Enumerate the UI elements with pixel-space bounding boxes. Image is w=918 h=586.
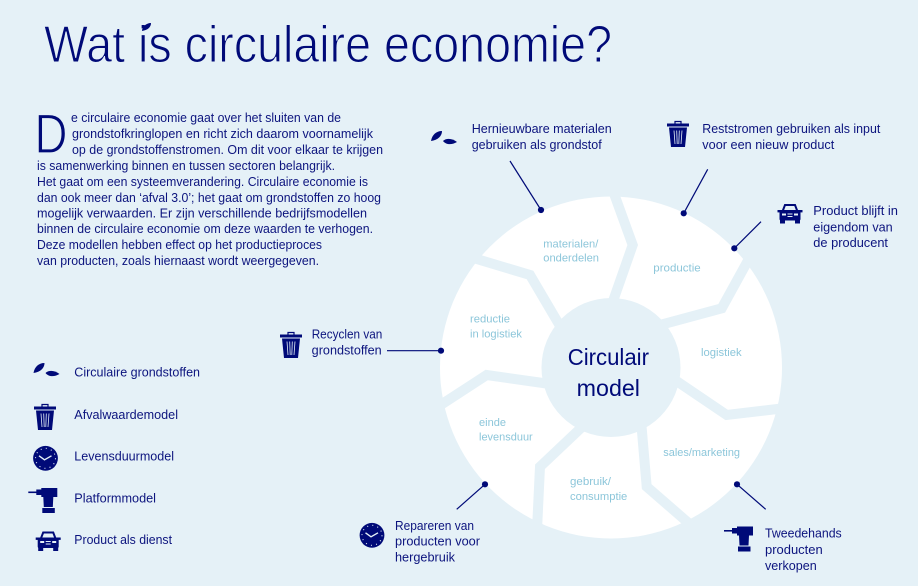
intro text block: grondstofkringlopen en richt zich daarom voornamelijk: [72, 127, 374, 141]
intro text block: [34, 102, 383, 268]
intro text block: mogelijk verwaarden. Er zijn verschillende bedrijfsmodellen: [37, 206, 367, 220]
icon: leaves: [431, 131, 457, 144]
callout text: verkopen: [765, 559, 817, 573]
title: Wat is circulaire economie?: [44, 16, 612, 74]
intro text block: op de grondstoffenstromen. Om dit voor elkaar te krijgen: [72, 143, 383, 157]
segment: gebruik/consumptie: consumptie: [570, 491, 627, 503]
icon: bin: [667, 122, 689, 147]
legend item: afvalwaardemodel: Afvalwaardemodel: [74, 408, 178, 422]
callout text: [472, 122, 612, 152]
callout: hernieuwbare materialen: [431, 122, 612, 213]
icon: bin: [280, 332, 302, 358]
icon: drill: [724, 526, 753, 552]
callout text: [395, 519, 480, 565]
segment separators: [436, 188, 790, 530]
centre circle: [542, 298, 680, 437]
intro text block: Deze modellen hebben effect op het productieproces: [37, 238, 322, 252]
callout: repareren: [360, 481, 488, 565]
segment: einde levensduur: levensduur: [479, 432, 533, 444]
callout text: Repareren van: [395, 519, 474, 533]
callout text: eigendom van: [813, 220, 893, 234]
segment: sales/marketing: sales/marketing: [663, 447, 740, 459]
callout text: hergebruik: [395, 551, 456, 565]
segment: materialen/onderdelen: materialen/: [543, 238, 598, 250]
white outer disc: [440, 196, 782, 538]
connector: [457, 481, 488, 509]
callout: recyclen: [280, 328, 444, 358]
callout text: Tweedehands: [765, 527, 842, 541]
segment: reductie in logistiek: [470, 314, 523, 341]
callout text: gebruiken als grondstof: [472, 138, 602, 152]
callout text: [702, 122, 881, 152]
callout: tweedehands: [724, 481, 842, 573]
intro text block: binnen de circulaire economie om deze waarden te verhogen.: [37, 222, 373, 236]
segment: gebruik/consumptie: gebruik/: [570, 476, 611, 488]
segment: einde levensduur: einde: [479, 417, 506, 429]
callout text: Recyclen van: [312, 328, 382, 342]
legend item: platformmodel: [28, 488, 156, 513]
segment: logistiek: logistiek: [701, 347, 742, 359]
segment: reductie in logistiek: reductie: [470, 314, 510, 326]
segment: gebruik/consumptie: [570, 476, 627, 503]
segment: einde levensduur: [479, 417, 533, 444]
segment: reductie in logistiek: in logistiek: [470, 329, 523, 341]
segment: productie: productie: [653, 263, 701, 275]
icon: car: [778, 205, 802, 224]
intro text block: van producten, zoals hiernaast wordt weergegeven.: [37, 254, 319, 268]
callout text: voor een nieuw product: [702, 138, 835, 152]
legend item: circulaire grondstoffen: [34, 363, 200, 380]
callout text: Reststromen gebruiken als input: [702, 122, 881, 136]
callout text: [813, 204, 898, 250]
centre label: Circulair: [568, 344, 649, 370]
connector: [387, 348, 444, 354]
legend item: platformmodel: Platformmodel: [74, 492, 156, 506]
callout text: de producent: [813, 236, 888, 250]
intro text block: dan ook meer dan ‘afval 3.0’; het gaat om grondstoffen zo hoog: [37, 191, 381, 205]
icon: clock: [360, 523, 384, 548]
intro text block: is samenwerking binnen en tussen sectoren belangrijk.: [37, 159, 335, 173]
intro text block: D: [34, 102, 68, 165]
legend item: afvalwaardemodel: [34, 404, 178, 430]
callout text: grondstoffen: [312, 344, 382, 358]
legend item: product als dienst: Product als dienst: [74, 533, 172, 547]
callout text: Hernieuwbare materialen: [472, 122, 612, 136]
circular model wheel: [436, 188, 790, 538]
connector: [734, 481, 766, 509]
intro text block: e circulaire economie gaat over het sluiten van de: [71, 111, 341, 125]
segment: materialen/onderdelen: [543, 238, 599, 265]
callout text: producten voor: [395, 535, 480, 549]
legend item: levensduurmodel: Levensduurmodel: [74, 450, 174, 464]
legend item: product als dienst: [36, 532, 172, 551]
callout text: Product blijft in: [813, 204, 898, 218]
centre label: model: [577, 375, 640, 401]
connector: [681, 169, 708, 216]
connector: [731, 222, 761, 251]
centre label: [568, 344, 649, 401]
callout text: producten: [765, 543, 823, 557]
intro text block: Het gaat om een systeemverandering. Circulaire economie is: [37, 175, 368, 189]
callout text: [312, 328, 382, 358]
segment: materialen/onderdelen: onderdelen: [543, 253, 599, 265]
callout text: [765, 527, 842, 573]
connector: [510, 161, 544, 213]
legend item: levensduurmodel: [33, 446, 174, 471]
legend item: circulaire grondstoffen: Circulaire grondstoffen: [74, 366, 200, 380]
callout: reststromen: [667, 122, 881, 216]
legend: [28, 363, 200, 551]
callout: product in eigendom: [731, 204, 898, 251]
